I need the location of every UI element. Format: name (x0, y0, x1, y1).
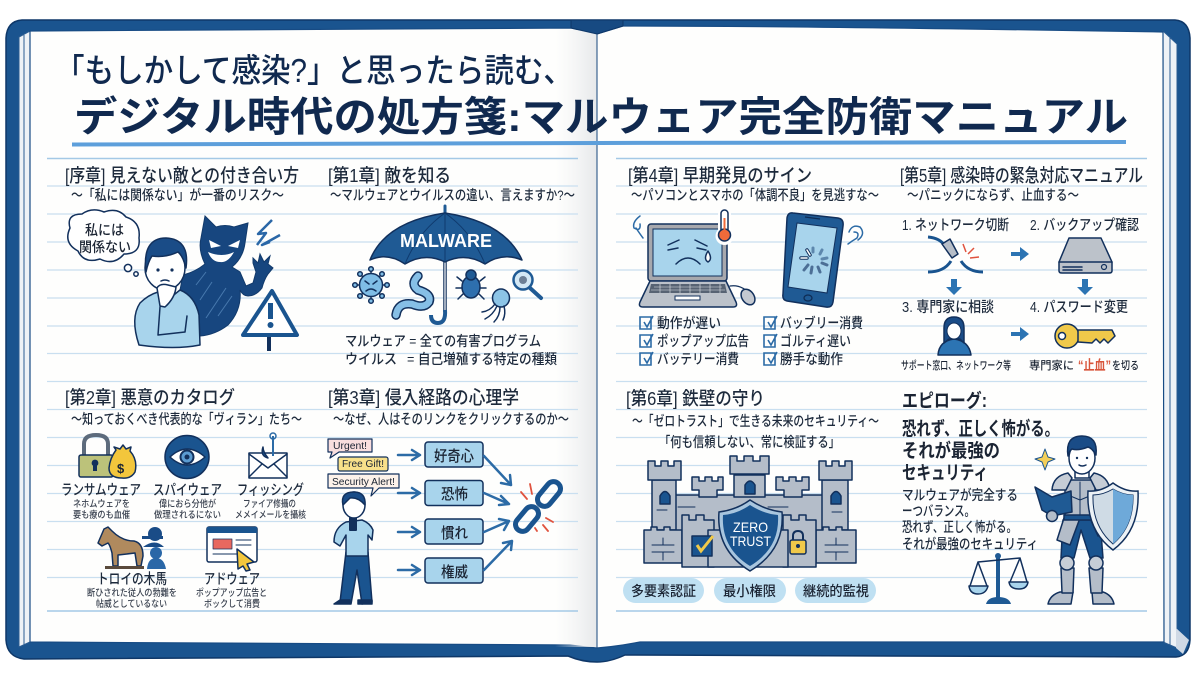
epilogue statement: それが最強の (902, 439, 1000, 462)
golden key icon (1055, 324, 1115, 348)
symptom checklist: ポップアップ広告 (657, 333, 749, 349)
step captions: サポート窓口、ネットワーク等 (901, 358, 1011, 372)
step captions: を切る (1112, 359, 1139, 372)
epilogue statement: 恐れず、正しく怖がる。 (902, 417, 1059, 440)
epilogue statement: セキュリティ (902, 463, 988, 484)
warning sign (243, 291, 297, 351)
worm icon (396, 276, 430, 315)
heading: [第3章] 侵入経路の心理学 (328, 387, 519, 408)
thought bubble: 関係ない (79, 239, 131, 255)
subheading: 〜マルウェアとウイルスの違い、言えますか?〜 (330, 187, 575, 203)
trojan label: トロイの木馬 (97, 571, 167, 588)
trojan horse icon (98, 527, 144, 569)
panel: chapter 5 (900, 165, 1143, 373)
phishing label: フィッシング (237, 482, 304, 499)
sick laptop icon (634, 216, 758, 307)
adware icon (207, 527, 257, 571)
alert bubbles: Security Alert! (332, 477, 395, 488)
subheading: 〜パニックにならず、止血する〜 (907, 187, 1079, 203)
padlock tile (790, 531, 806, 554)
title line 1: 「もしかして感染?」と思ったら読む、 (55, 52, 573, 89)
panel: chapter 4 (628, 165, 879, 367)
adware label: ポップアップ広告と (196, 587, 267, 599)
spyware label (153, 482, 222, 521)
epilogue body: ーつバランス。 (902, 503, 975, 519)
step captions (901, 357, 1139, 373)
panel: chapter 1 (328, 165, 575, 367)
subheading: 〜知っておくべき代表的な「ヴィラン」たち〜 (71, 411, 302, 427)
panel: prologue (65, 165, 299, 351)
arrows to broken chain (484, 456, 512, 570)
heading: [序章] 見えない敵との付き合い方 (65, 165, 299, 186)
spyware label: 做理されるにない (154, 509, 221, 521)
spyware icon (165, 436, 209, 478)
open book (1035, 487, 1072, 522)
epilogue body (902, 487, 1038, 552)
worried person (135, 238, 200, 348)
principle chips: 多要素認証 (631, 583, 696, 599)
panel: epilogue (902, 389, 1138, 604)
principle chips: 継続的監視 (803, 583, 869, 599)
heading: [第2章] 悪意のカタログ (65, 387, 235, 408)
paper page edges (19, 31, 30, 647)
title (55, 52, 1128, 144)
castle (644, 456, 856, 567)
step captions: “止血” (1078, 357, 1111, 373)
symptom checklist: バッブリー消費 (780, 315, 863, 331)
adware label: アドウェア (204, 571, 260, 588)
symptom checklist: ゴルティ遅い (780, 333, 851, 349)
ransomware label: 要も療のも血催 (73, 509, 130, 521)
adware label (196, 571, 267, 610)
epilogue body: マルウェアが完全する (902, 487, 1018, 503)
virus icon (353, 267, 389, 303)
heading: [第6章] 鉄壁の守り (626, 388, 765, 409)
symptom checklist: 勝手な動作 (780, 351, 843, 367)
sparkle (1035, 449, 1055, 470)
zero trust motto: 「何も信頼しない、常に検証する」 (659, 434, 840, 450)
octopus icon (482, 289, 510, 322)
step labels: 1. ネットワーク切断 (902, 217, 1009, 234)
principle chips: 最小権限 (723, 583, 776, 599)
flow arrows (946, 247, 1093, 341)
heading: [第5章] 感染時の緊急対応マニュアル (900, 165, 1143, 186)
ransomware label (61, 482, 141, 521)
symptom checklist (640, 315, 863, 367)
heading: [第1章] 敵を知る (328, 165, 451, 186)
trojan label: 帖威としているない (96, 598, 167, 610)
armored knight (1048, 436, 1114, 604)
title line 2: デジタル時代の処方箋:マルウェア完全防衛マニュアル (74, 94, 1128, 140)
panel: chapter 6 (623, 388, 879, 603)
definitions: ウイルス (345, 351, 397, 367)
page corner glare (1176, 628, 1189, 654)
subheading: 〜パソコンとスマホの「体調不良」を見逃すな〜 (631, 187, 879, 203)
definitions: マルウェア = 全ての有害プログラム (345, 333, 541, 349)
panel: chapter 3 (328, 387, 569, 604)
step labels: 2. バックアップ確認 (1030, 217, 1139, 234)
step captions: 専門家に (1029, 358, 1074, 372)
trojan label: 断ひされた従人の勃難を (87, 587, 177, 599)
subheading: 〜なぜ、人はそのリンクをクリックするのか〜 (333, 411, 569, 427)
phishing label (235, 482, 306, 521)
lightning marks (257, 220, 280, 245)
motive boxes: 恐怖 (441, 486, 468, 503)
zero trust shield: TRUST (730, 533, 771, 549)
thermometer (716, 208, 734, 245)
epilogue body: 恐れず、正しく怖がる。 (902, 519, 1017, 535)
epilogue heading: エピローグ: (902, 389, 987, 412)
thought bubble: 私には (85, 222, 124, 238)
thought bubble (68, 210, 139, 276)
symptom checklist: 動作が遅い (657, 315, 721, 331)
epilogue statement (902, 417, 1059, 484)
person with phone (334, 492, 373, 604)
bug icon (456, 270, 486, 299)
phishing icon (249, 433, 287, 478)
phishing label: メメイメールを攝核 (235, 509, 306, 521)
alert bubbles: Free Gift! (342, 459, 384, 470)
step labels: 3. 専門家に相談 (902, 299, 994, 316)
ransomware label: ランサムウェア (61, 482, 141, 499)
epilogue body: それが最強のセキュリティ (902, 536, 1038, 552)
adware label: ボックして消費 (204, 598, 260, 610)
title underline (72, 142, 1126, 144)
checkmark tile (692, 536, 713, 556)
motive boxes (425, 442, 483, 583)
motive boxes: 好奇心 (434, 448, 474, 465)
zero trust shield: ZERO (733, 519, 768, 535)
definitions (345, 333, 557, 367)
phishing label: ファイア修攝の (243, 498, 296, 510)
ransomware icon: $ (117, 461, 125, 476)
motive boxes: 権威 (441, 564, 468, 581)
step labels: 4. パスワード変更 (1030, 299, 1128, 316)
ransomware label: ネホムウェアを (73, 499, 130, 510)
subheading: 〜「ゼロトラスト」で生きる未来のセキュリティ〜 (632, 413, 879, 429)
panel: chapter 2 (61, 387, 306, 610)
unplugged cable icon (928, 237, 983, 272)
balance scale icon (969, 553, 1028, 604)
umbrella (370, 206, 522, 323)
broken chain icon (513, 479, 563, 534)
ransomware icon (79, 435, 136, 478)
trojan label (87, 571, 177, 610)
arrows into motive boxes (398, 450, 420, 575)
spine band at top (571, 20, 623, 34)
alert bubbles (328, 439, 399, 496)
definitions: = 自己増殖する特定の種類 (407, 351, 557, 367)
subheading: 〜「私には関係ない」が一番のリスク〜 (71, 187, 284, 203)
hard drive icon (1059, 238, 1112, 273)
symptom checklist: バッテリー消費 (657, 351, 739, 367)
alert bubbles: Urgent! (333, 441, 367, 452)
devil shadow (180, 216, 273, 336)
zero trust shield (719, 500, 782, 571)
heading: [第4章] 早期発見のサイン (628, 165, 812, 186)
knight shield (1088, 483, 1138, 550)
spyware label: スパイウェア (153, 482, 222, 499)
phone icon (783, 213, 863, 307)
principle chips (623, 578, 876, 603)
umbrella: MALWARE (400, 231, 492, 251)
magnifier icon (514, 270, 541, 298)
spyware label: 偉におら分他が (159, 498, 216, 510)
motive boxes: 慣れ (441, 524, 468, 542)
specialist icon (938, 317, 971, 355)
ruled notebook lines (47, 158, 1147, 611)
step labels (902, 217, 1139, 316)
spy figures icon (142, 527, 166, 569)
